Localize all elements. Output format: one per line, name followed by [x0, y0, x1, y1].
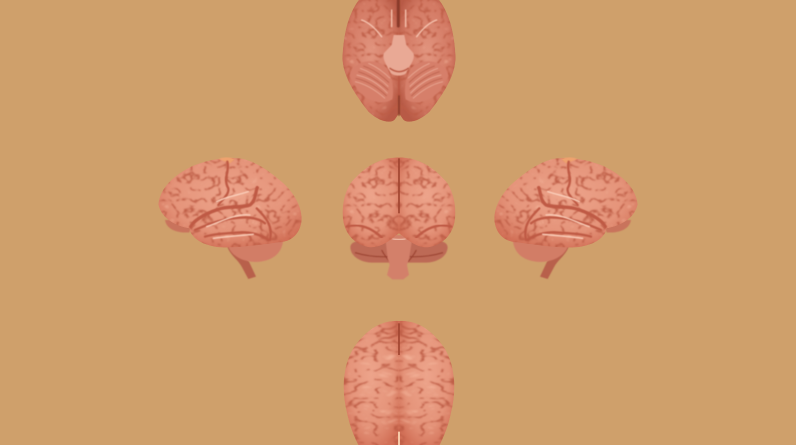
cerebellum lobes — [350, 61, 448, 102]
brain: top view, bottom — [344, 321, 454, 445]
central fissure — [396, 158, 401, 213]
brain: underside view, top — [342, 0, 456, 122]
central fissure — [396, 323, 401, 355]
brainstem — [383, 35, 414, 76]
brain: right side view — [494, 157, 638, 279]
brain: left side view — [158, 157, 302, 279]
brain: front view, centre — [343, 157, 455, 279]
